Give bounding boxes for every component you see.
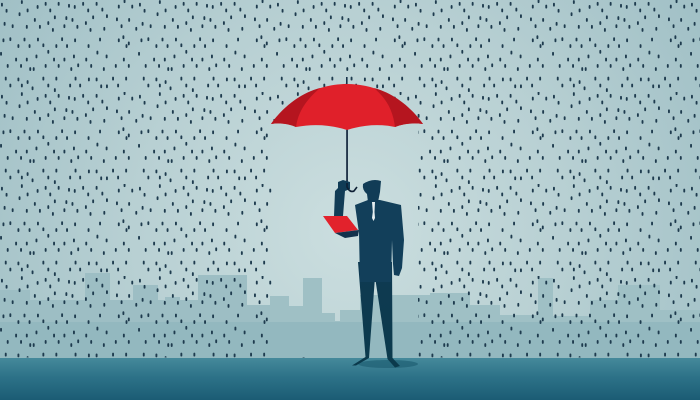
umbrella shaft: [346, 128, 348, 184]
ground: [0, 358, 700, 400]
businessman: [323, 180, 404, 368]
raised arm: [334, 180, 350, 216]
figure shadow on ground: [358, 360, 418, 368]
far buildings, left: [0, 273, 270, 360]
umbrella: [271, 77, 423, 184]
city skyline: [0, 273, 700, 360]
far buildings, centre: [270, 278, 360, 360]
shirt and tie: [372, 202, 375, 221]
torso jacket: [355, 200, 404, 282]
laptop: [323, 216, 358, 233]
legs: [352, 262, 400, 368]
head and hair: [363, 180, 381, 202]
hand under laptop: [335, 230, 359, 238]
canopy right shaded panel: [374, 88, 423, 127]
umbrella tip: [346, 77, 348, 86]
umbrella handle hook: [347, 183, 357, 192]
far buildings, right of figure: [360, 278, 700, 360]
canopy left shaded panel: [271, 88, 320, 127]
canopy: [271, 84, 423, 130]
near skyline band: [0, 322, 700, 360]
